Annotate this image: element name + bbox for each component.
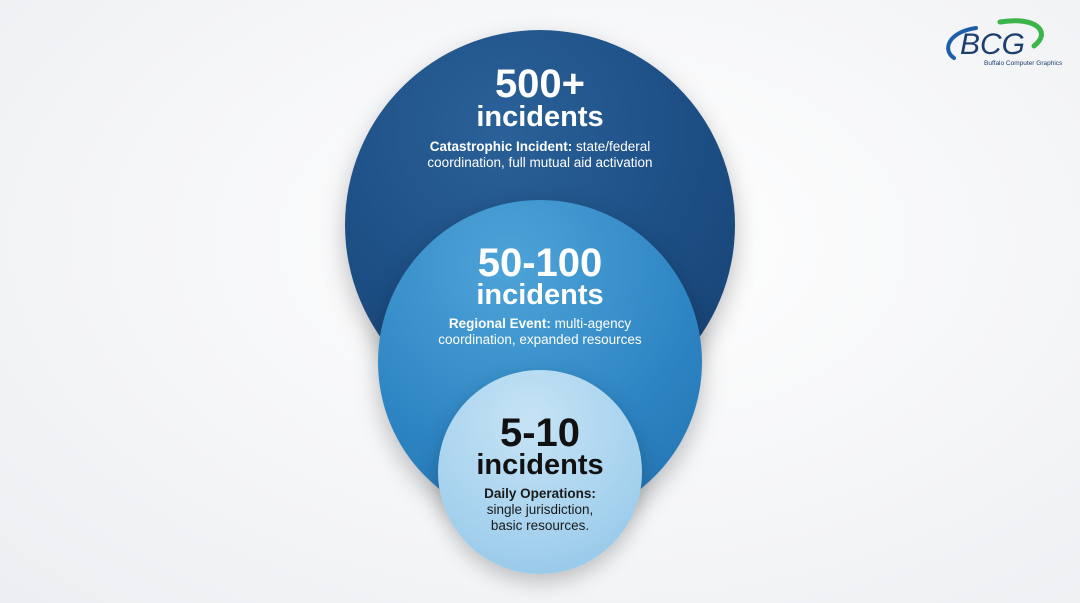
text: incidents small: incidents — [476, 449, 604, 481]
logo: BCG: BCG — [960, 28, 1025, 61]
text: 5-10: 5-10 — [500, 411, 580, 455]
text: 50-100: 50-100 — [478, 241, 602, 285]
text: regional description — [438, 316, 642, 347]
text: daily description: single jurisdiction, — [487, 502, 593, 517]
circle: medium regional — [378, 200, 702, 524]
text: daily description: Daily Operations: — [484, 486, 596, 501]
circle: small daily — [438, 370, 642, 574]
text: regional description: coordination, expanded resources — [438, 332, 642, 347]
text: catastrophic description — [427, 139, 653, 170]
text: incidents large: incidents — [476, 101, 604, 133]
text: catastrophic description: coordination, full mutual aid activation — [427, 155, 653, 170]
circle: large catastrophic — [345, 30, 735, 420]
text: catastrophic description: Catastrophic Incident: state/federal — [430, 139, 650, 154]
text: regional description: Regional Event: multi-agency — [449, 316, 631, 331]
logo: BCG: Buffalo Computer Graphics — [984, 60, 1063, 67]
text: incidents medium: incidents — [476, 279, 604, 311]
text: daily description: basic resources. — [491, 518, 589, 533]
text: 500+: 500+ — [495, 62, 585, 106]
logo: BCG — [946, 18, 1063, 67]
text: daily description — [484, 486, 596, 533]
